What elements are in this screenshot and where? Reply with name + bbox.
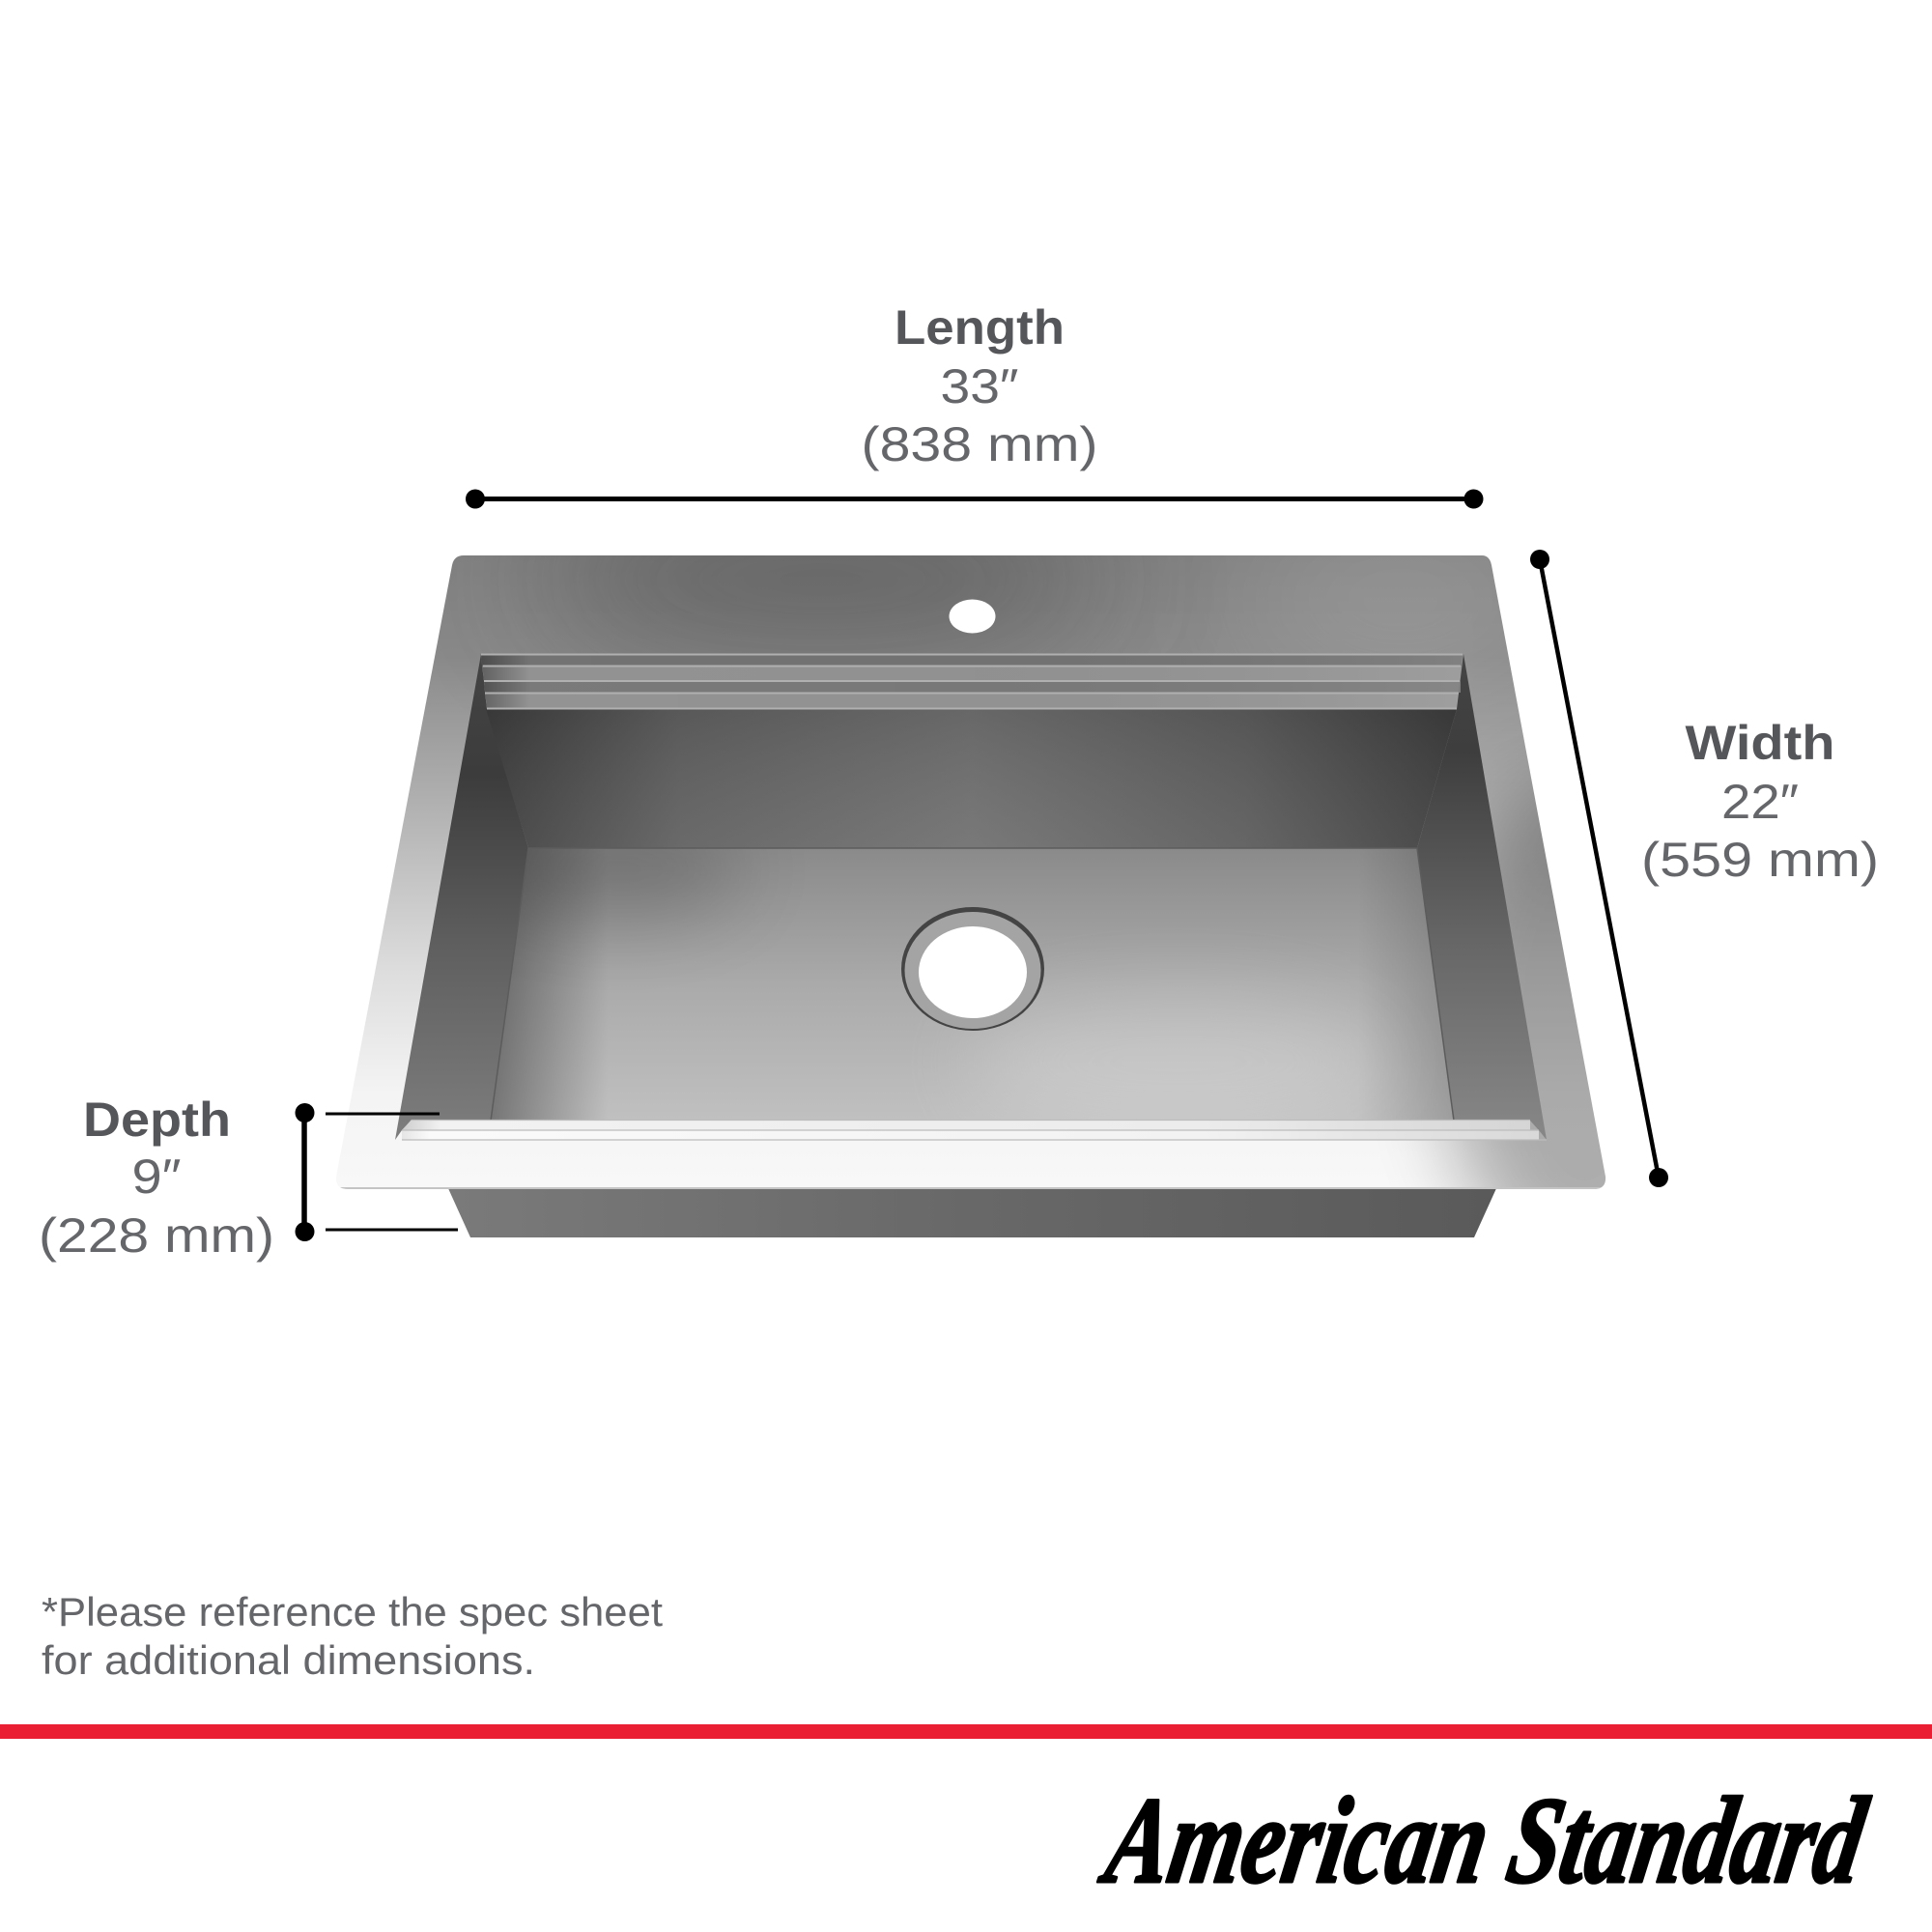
- sink top plate: [339, 555, 1605, 1189]
- width label: [1641, 716, 1879, 887]
- faucet hole: [949, 599, 995, 634]
- length label: Length: [895, 300, 1065, 355]
- back bowl wall: [486, 709, 1457, 848]
- length measurement arrow: [466, 489, 1484, 508]
- length label: 33″: [941, 359, 1018, 413]
- length label: (838 mm): [862, 417, 1097, 471]
- footnote: [42, 1589, 663, 1683]
- drain: [901, 907, 1044, 1031]
- rear roller rack ledge: [481, 654, 1463, 709]
- left bowl wall: [395, 654, 528, 1140]
- depth label: (228 mm): [39, 1208, 274, 1263]
- width label: Width: [1685, 716, 1835, 770]
- front roller rack ledge: [402, 1120, 1547, 1140]
- depth measurement arrow: [296, 1103, 458, 1241]
- width label: (559 mm): [1641, 833, 1879, 887]
- depth label: [39, 1093, 274, 1263]
- width measurement arrow: [1530, 550, 1668, 1187]
- depth label: 9″: [131, 1150, 182, 1204]
- depth label: Depth: [83, 1093, 231, 1147]
- sink under-body: [447, 1186, 1497, 1237]
- right bowl wall: [1417, 654, 1547, 1140]
- footnote: for additional dimensions.: [42, 1637, 535, 1683]
- sink product illustration: [339, 555, 1605, 1237]
- length label: [862, 300, 1097, 471]
- footnote: *Please reference the spec sheet: [42, 1589, 663, 1634]
- floor edge lines: [491, 848, 1454, 1121]
- width label: 22″: [1721, 775, 1799, 829]
- bowl floor: [491, 848, 1453, 1120]
- red divider bar: [0, 1724, 1932, 1739]
